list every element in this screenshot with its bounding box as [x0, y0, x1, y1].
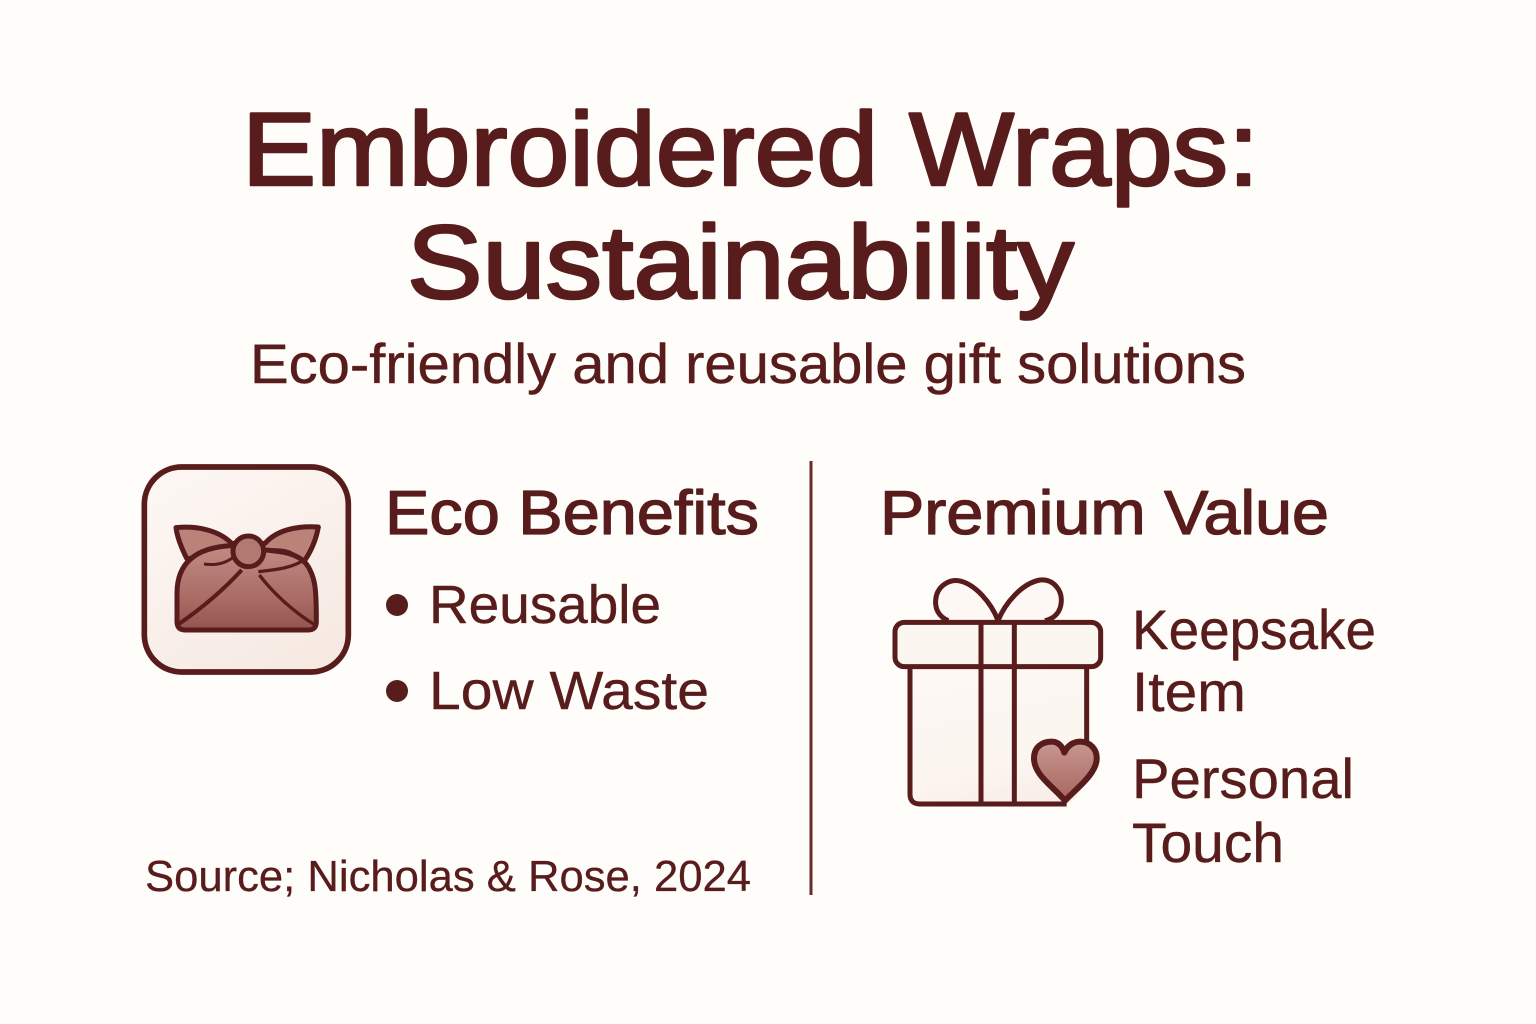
heading: eco benefits: Eco Benefits [385, 479, 759, 548]
divider [810, 461, 812, 895]
title: Embroidered Wraps: [242, 92, 1259, 208]
label: personal touch [1132, 747, 1354, 874]
panel: eco benefits [144, 467, 759, 721]
icon: gift box with heart [895, 580, 1101, 804]
bullet list: Low Waste [429, 661, 709, 721]
bullet list: Reusable [429, 575, 661, 635]
bullet list [386, 575, 709, 721]
title [242, 92, 1259, 321]
heading: premium value: Premium Value [880, 479, 1329, 548]
panel: premium value [880, 479, 1376, 874]
label: keepsake item: Keepsake [1132, 598, 1376, 661]
subtitle: Eco-friendly and reusable gift solutions [250, 332, 1246, 395]
source note: Source; Nicholas & Rose, 2024 [145, 852, 751, 901]
icon: wrapped furoshiki bundle [144, 467, 348, 672]
label: personal touch: Personal [1132, 747, 1354, 810]
label: keepsake item [1132, 598, 1376, 723]
label: personal touch: Touch [1132, 811, 1284, 874]
title: Sustainability [407, 205, 1074, 321]
label: keepsake item: Item [1132, 660, 1246, 723]
